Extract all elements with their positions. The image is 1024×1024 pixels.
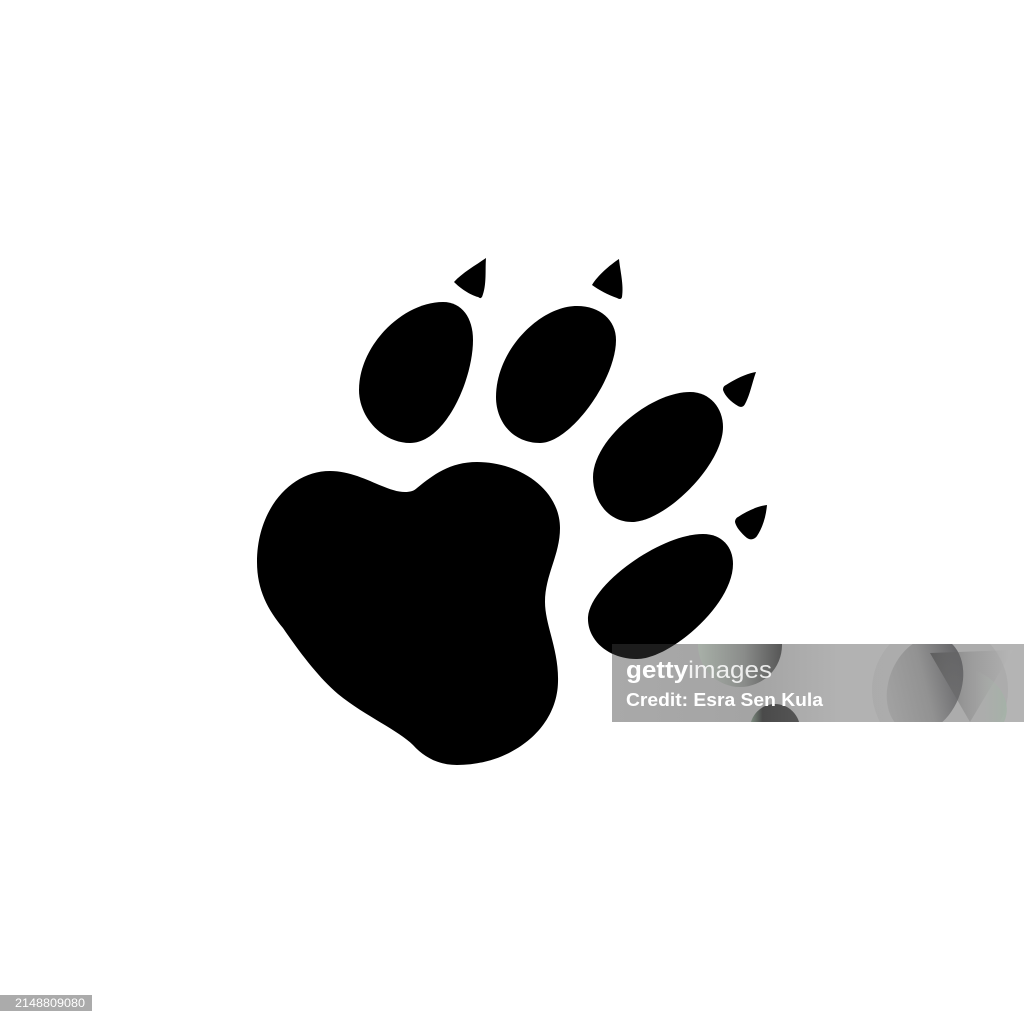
banner background <box>612 644 1024 722</box>
claw 1 <box>454 258 486 298</box>
getty images logo: gettyimages <box>626 657 772 684</box>
claw 2 <box>592 259 623 299</box>
main pad <box>257 462 560 765</box>
toe 3 <box>593 392 723 522</box>
watermark banner <box>612 644 1024 722</box>
claw 4 <box>735 505 767 539</box>
image id tag: 2148809080 <box>15 998 85 1010</box>
claw 3 <box>723 372 756 407</box>
paw print <box>257 258 767 765</box>
toe 4 <box>588 534 733 659</box>
image id tag <box>0 995 92 1011</box>
illustration: paw print with watermark <box>0 258 1024 1011</box>
toe 1 <box>359 302 473 443</box>
toe 2 <box>496 306 616 443</box>
credit line: Credit: Esra Sen Kula <box>626 690 824 710</box>
